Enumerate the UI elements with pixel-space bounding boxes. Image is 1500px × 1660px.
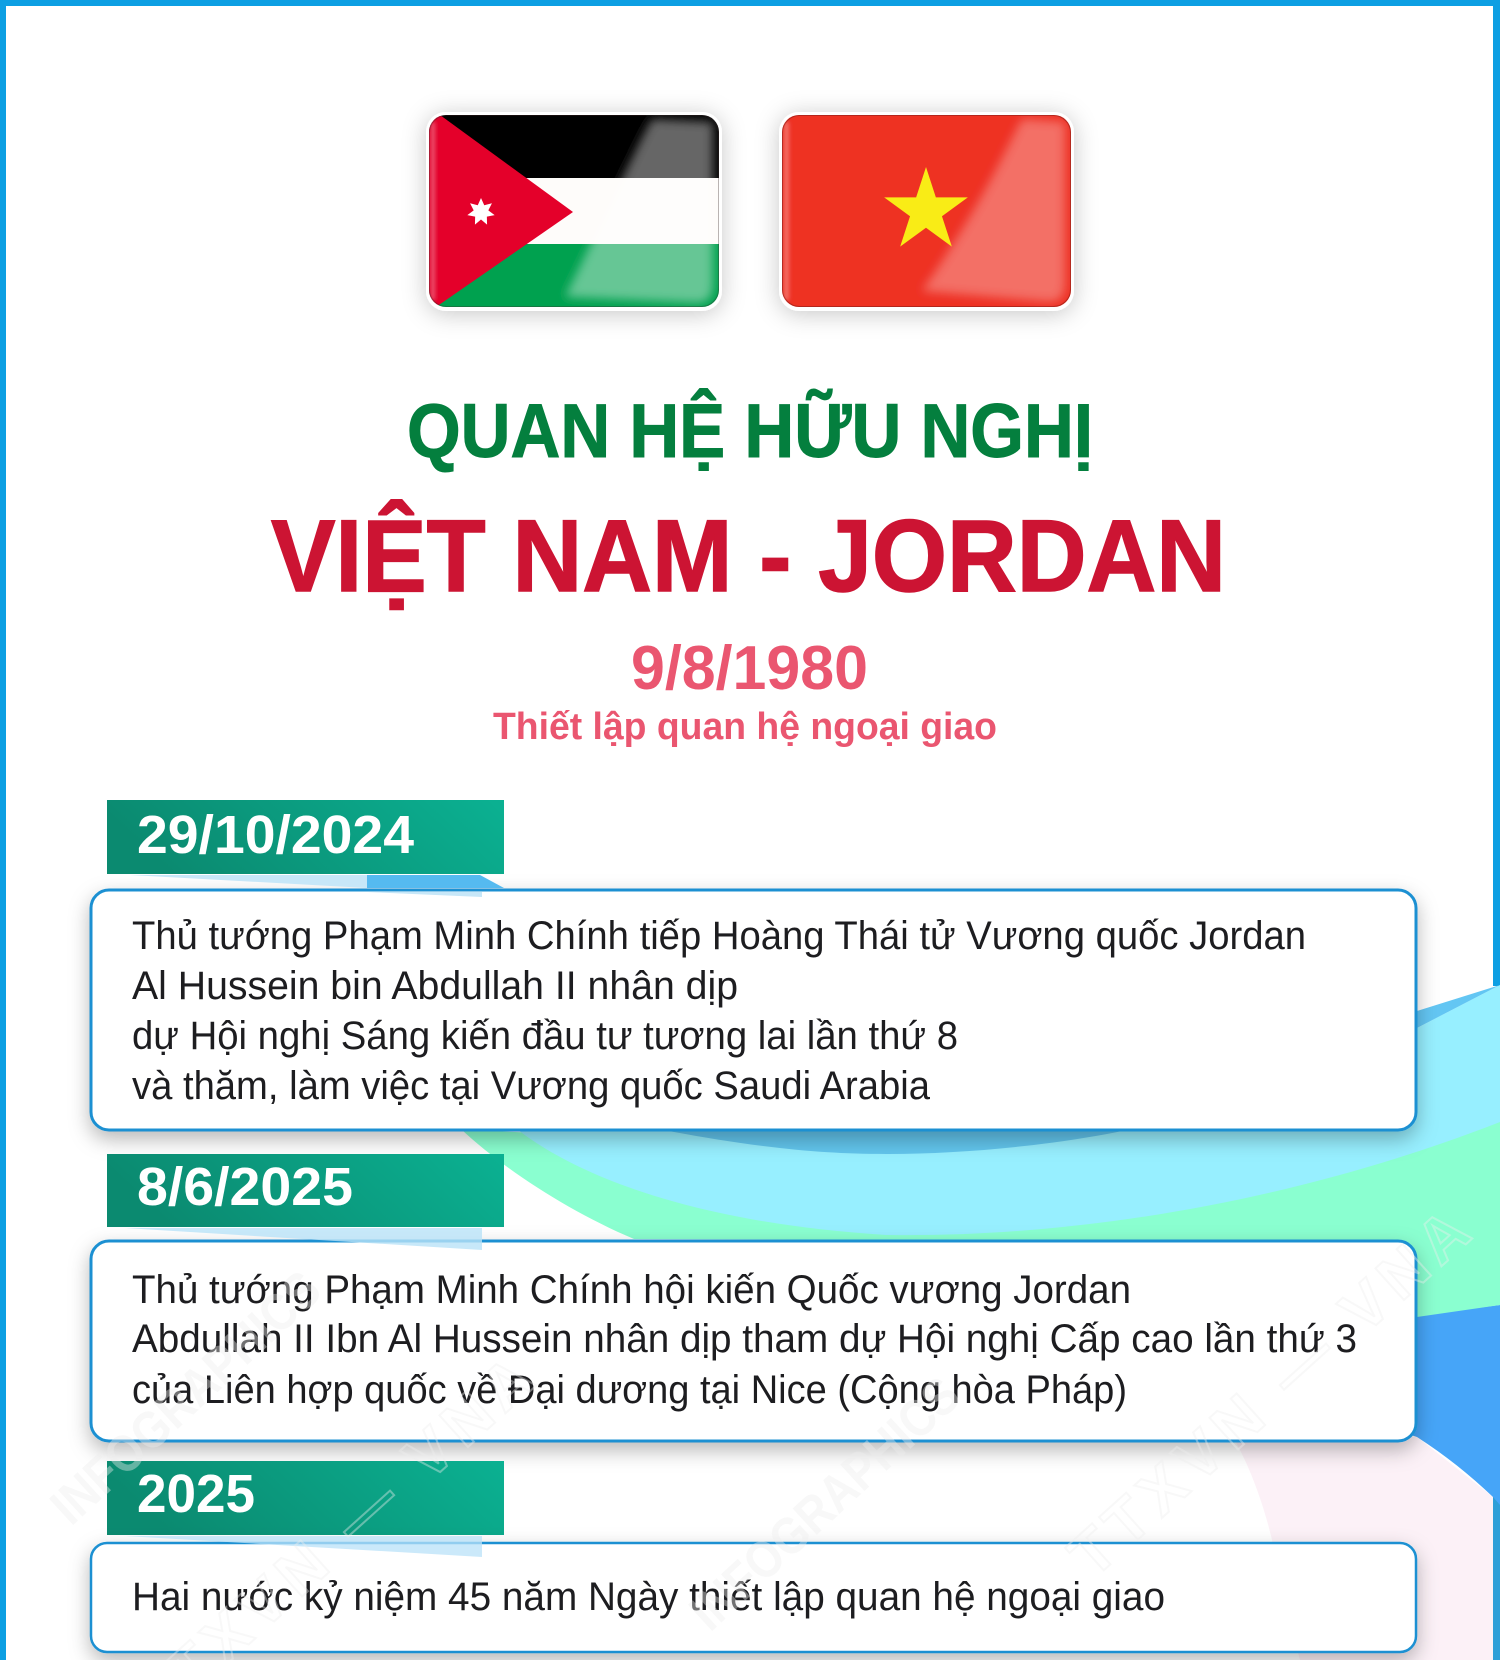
flag: Jordan — [426, 112, 722, 311]
event box 1: Al Hussein bin Abdullah II nhân dịp — [132, 964, 738, 1008]
icon: yellow star — [884, 167, 968, 247]
ribbon under tab 1 — [130, 875, 504, 897]
event box 1 — [91, 890, 1416, 1130]
event box 1: dự Hội nghị Sáng kiến đầu tư tương lai lần thứ 8 — [132, 1014, 958, 1058]
icon: seven-point star — [467, 198, 495, 225]
watermarks: INFOGRAPHICS — [679, 1366, 971, 1642]
title line 1: QUAN HỆ HỮU NGHỊ — [407, 388, 1093, 474]
establishment date: 9/8/1980 — [631, 634, 868, 703]
event box 2: Thủ tướng Phạm Minh Chính hội kiến Quốc vương Jordan — [132, 1268, 1131, 1312]
event box 3: Hai nước kỷ niệm 45 năm Ngày thiết lập quan hệ ngoại giao — [132, 1575, 1165, 1619]
event box 2 — [91, 1241, 1416, 1441]
event box 2: của Liên hợp quốc về Đại dương tại Nice (Cộng hòa Pháp) — [132, 1368, 1127, 1412]
date tab: 29/10/2024 — [107, 800, 504, 874]
watermarks: INFOGRAPHICS — [40, 1260, 332, 1536]
flag: Vietnam — [779, 112, 1074, 311]
event box 2: Abdullah II Ibn Al Hussein nhân dịp tham dự Hội nghị Cấp cao lần thứ 3 — [132, 1317, 1357, 1361]
date tab: 2025: 2025 — [137, 1464, 255, 1524]
watermarks — [40, 1197, 1483, 1660]
title line 2: VIỆT NAM - JORDAN — [271, 499, 1226, 613]
ribbon under tab 3 — [125, 1536, 482, 1557]
date tab: 8/6/2025: 8/6/2025 — [137, 1157, 353, 1217]
establishment caption: Thiết lập quan hệ ngoại giao — [493, 706, 997, 748]
date tab: 8/6/2025 — [107, 1154, 504, 1227]
background waves — [462, 985, 1500, 1660]
event box 1: Thủ tướng Phạm Minh Chính tiếp Hoàng Thái tử Vương quốc Jordan — [132, 914, 1306, 958]
event box 1: và thăm, làm việc tại Vương quốc Saudi Arabia — [132, 1064, 931, 1108]
watermarks: TTXVN — VNA — [1056, 1197, 1483, 1590]
ribbon under tab 2 — [125, 1228, 482, 1250]
event box 3 — [91, 1543, 1416, 1652]
date tab: 29/10/2024: 29/10/2024 — [137, 805, 414, 865]
date tab: 2025 — [107, 1461, 504, 1535]
